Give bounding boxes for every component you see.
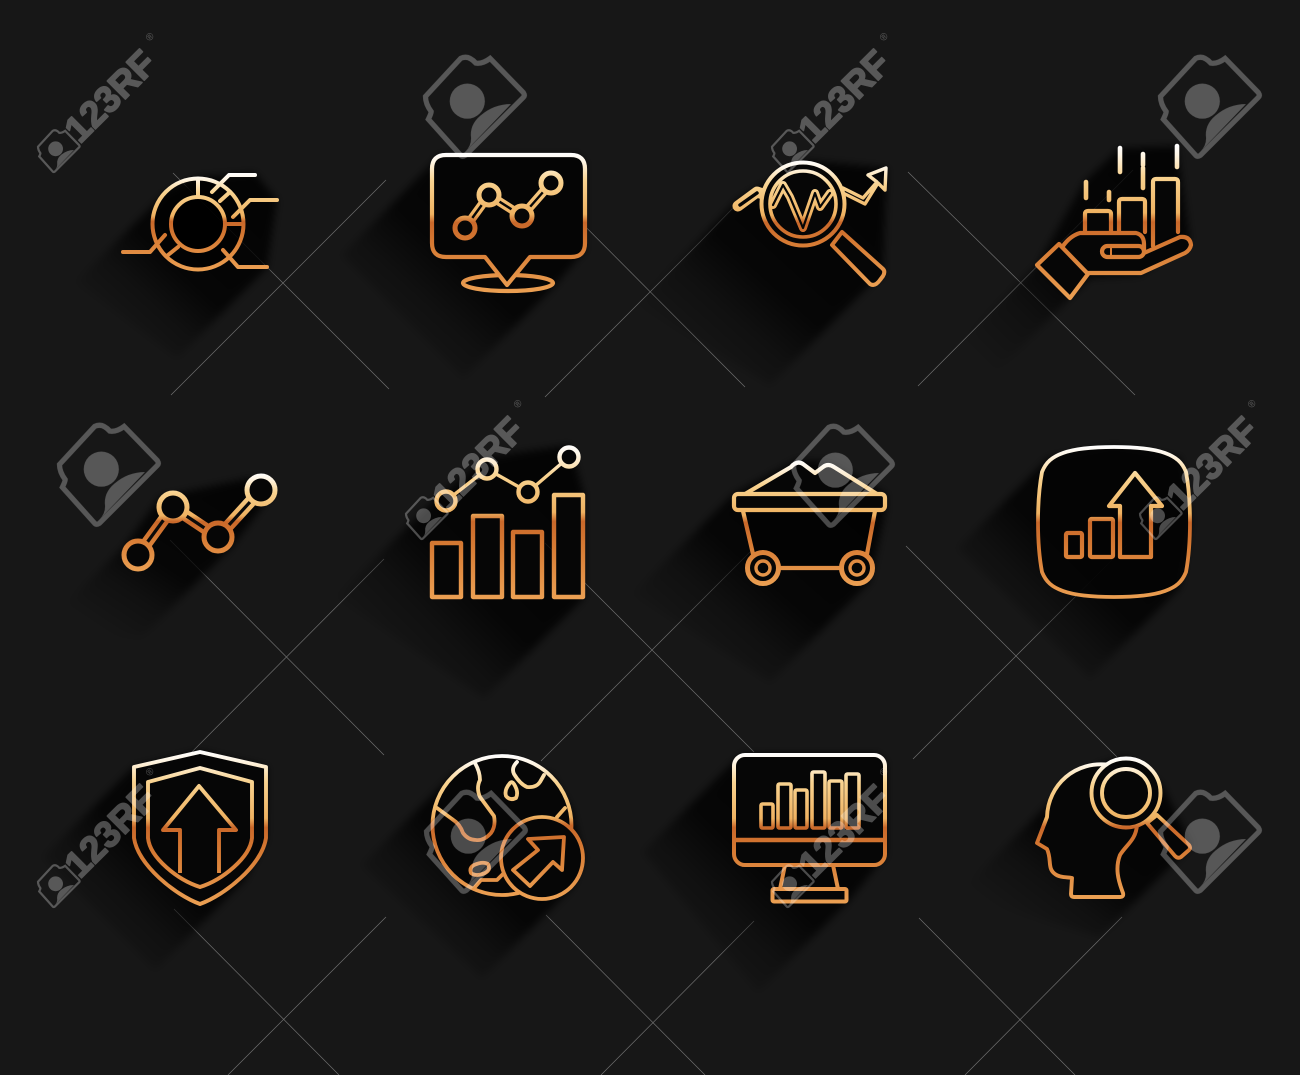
watermark: 123RF logotype, bottom left: 123RF [57,778,164,885]
watermark: 123RF logotype, top centre: ® [878,30,891,44]
icon: magnifier with wave and growth arrow [738,162,886,285]
watermark: 123RF logotype, top left: ® [144,30,157,44]
watermark: 123RF logotype, bottom centre [772,765,898,907]
watermark: 123RF logotype, top centre: 123RF [791,43,898,150]
watermark: 123RF logotype, bottom centre: ® [878,765,891,779]
watermark: 123RF logotype, middle left: 123RF [425,410,532,517]
icon: bar chart with trend line [432,448,583,597]
watermark: large logo marks [59,57,1259,891]
icon: hand holding bar chart [1037,146,1191,298]
icon: shield with up arrow [134,752,266,904]
icon: globe with arrow badge [432,756,583,899]
watermark: 123RF logotype, middle right: ® [1246,397,1259,411]
watermark: 123RF logotype, middle right: 123RF [1159,410,1266,517]
watermark: 123RF logotype, bottom centre: 123RF [791,778,898,885]
watermark: 123RF logotype, middle left: ® [512,397,525,411]
icon: map pin with line chart [432,155,585,291]
watermark: 123RF logotype, top left [38,30,164,172]
icon: head with magnifier [1037,758,1190,897]
watermark: 123RF logotype, top centre [772,30,898,172]
icon: mining cart [734,463,885,584]
icon: computer monitor with bar chart [734,755,885,902]
icon: connected line chart [124,476,275,569]
icon: donut chart with callouts [123,175,277,270]
icon: rounded square with rising bars and arrow [1038,447,1190,597]
watermark: 123RF logotype, top left: 123RF [57,43,164,150]
long shadows [35,146,1192,992]
watermark: 123RF logotype, bottom left [38,765,164,907]
watermark: 123RF logotype, bottom left: ® [144,765,157,779]
watermark: 123RF logotype, middle left [406,397,532,539]
watermark: 123RF logotype, middle right [1140,397,1266,539]
